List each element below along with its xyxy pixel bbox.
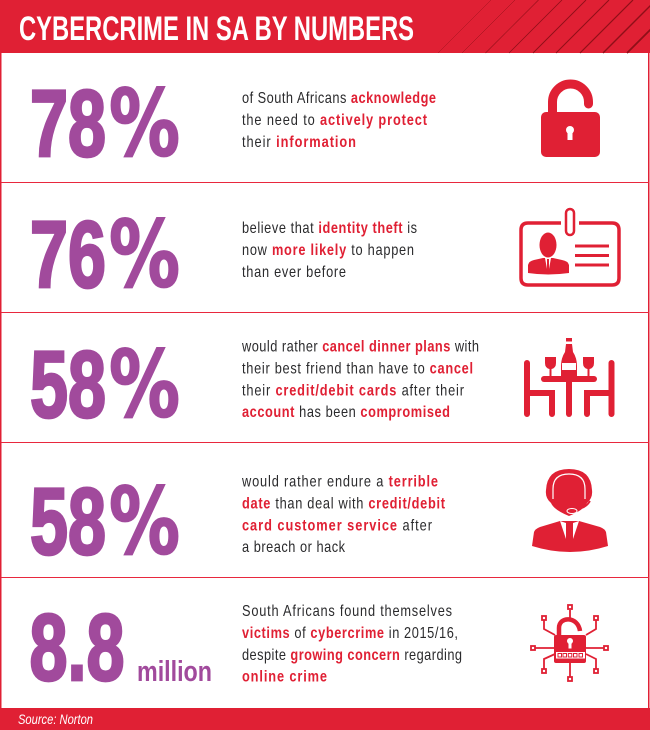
row 2: text: believe that identity theft is [242,220,417,237]
footer bar [0,708,650,730]
row 4: 58% statistic: % [109,468,180,575]
row 2: text: than ever before [242,264,346,281]
row 1: 78% statistic [30,70,180,177]
row 1: 78% statistic: % [109,70,180,177]
row 5: text: online crime [242,668,327,686]
icon: support agent headset [532,469,608,552]
row 1: 78% statistic: 78 [30,71,106,177]
row 1: text [242,90,436,151]
row 3: text: account has been compromised [242,404,450,421]
title: CYBERCRIME IN SA BY NUMBERS [19,10,414,48]
icon: dinner table [527,338,612,414]
row 4: text: a breach or hack [242,539,346,556]
row 4: text: date than deal with credit/debit [242,495,445,513]
row dividers [1,182,649,578]
header banner [0,0,650,53]
row 2: text [242,220,417,281]
row 1: text: the need to actively protect [242,112,427,129]
row 5: text: South Africans found themselves [242,603,452,620]
row 3: 58% statistic [30,331,180,438]
row 5: text: victims of cybercrime in 2015/16, [242,625,458,642]
row 2: 76% statistic: % [109,201,180,308]
icon: networked padlock [531,605,608,681]
row 5: text [242,603,462,686]
row 4: 58% statistic: 58 [30,469,106,575]
row 4: 58% statistic [30,468,180,575]
row 1: text: their information [242,134,356,151]
row 4: text: card customer service after [242,517,432,535]
row 2: 76% statistic [30,201,180,308]
row 3: text: would rather cancel dinner plans with [241,338,479,356]
source note: Source: Norton [18,711,93,727]
row 2: text: now more likely to happen [242,242,414,259]
row 5: text: despite growing concern regarding [242,647,462,664]
row 3: text: their credit/debit cards after their [242,382,464,400]
row 5: 8.8 million statistic: million [137,656,212,688]
row 4: text: would rather endure a terrible [241,473,438,491]
row 3: 58% statistic: % [109,331,180,438]
row 3: text [241,338,479,421]
row 1: text: of South Africans acknowledge [242,90,436,107]
row 3: 58% statistic: 58 [30,332,106,438]
icon: ID badge [521,209,619,285]
row 5: 8.8 million statistic: 8.8 [30,595,124,701]
row 3: text: their best friend than have to cancel [242,360,473,378]
row 4: text [241,473,445,556]
icon: open padlock [541,84,600,157]
row 2: 76% statistic: 76 [30,202,106,308]
